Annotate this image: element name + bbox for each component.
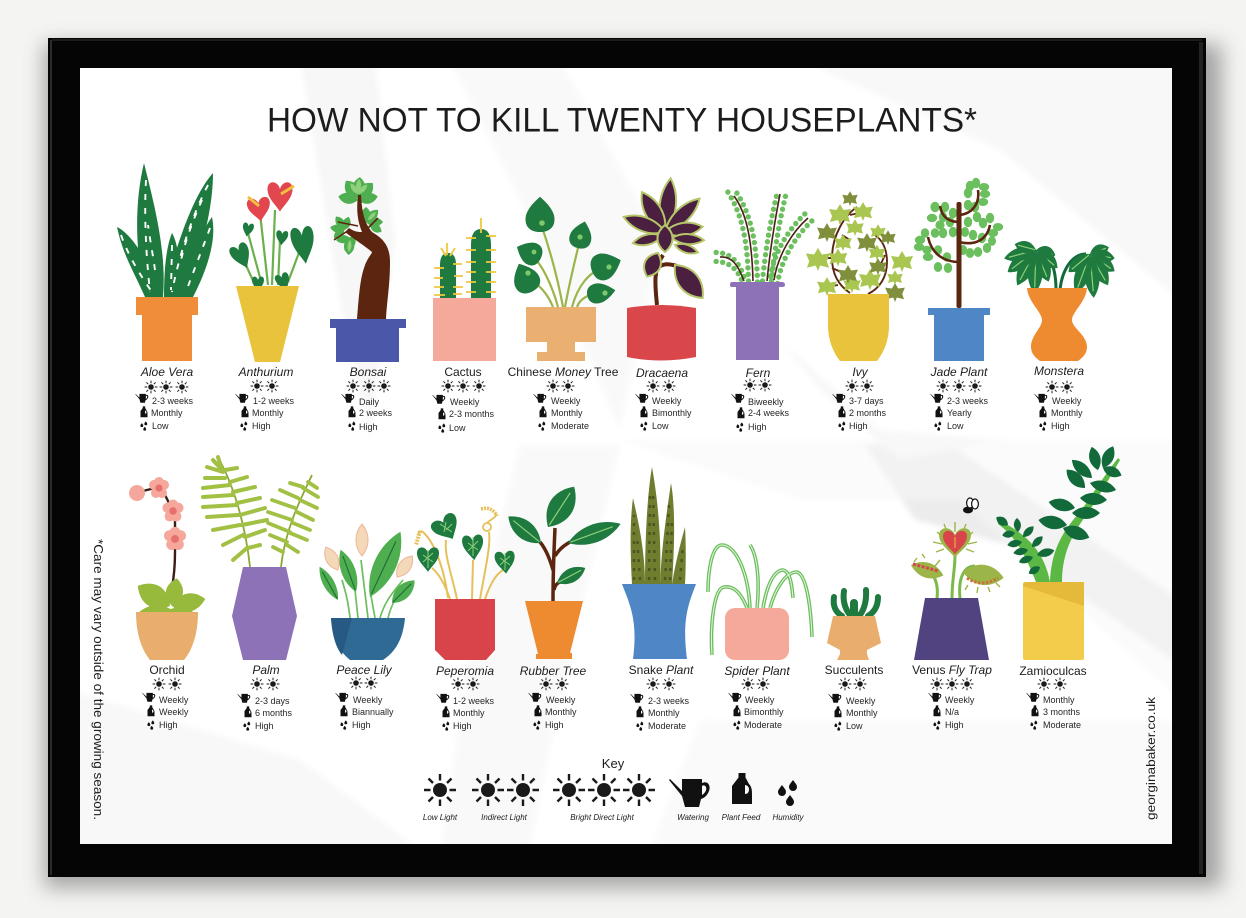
- white poster panel: [80, 68, 1172, 844]
- purple leaves: [621, 177, 710, 304]
- care info: High: [359, 422, 378, 432]
- plant: Peace Lily: [315, 524, 420, 730]
- care info: Low: [846, 721, 863, 731]
- aloe pot: [136, 297, 198, 361]
- care info: [528, 678, 577, 730]
- care info: Monthly: [1043, 695, 1075, 705]
- care info: Weekly: [945, 695, 975, 705]
- green frond dots: [712, 190, 816, 286]
- name: Peace Lily: [336, 663, 393, 677]
- care info: Moderate: [744, 720, 782, 730]
- name: Ivy: [852, 365, 869, 379]
- care info: Weekly: [551, 396, 581, 406]
- care info: 1-2 weeks: [453, 696, 495, 706]
- orchid stem: [143, 488, 175, 592]
- name: Orchid: [149, 663, 185, 677]
- name: Rubber Tree: [520, 664, 587, 678]
- care info: 2-3 weeks: [152, 396, 194, 406]
- plant: Snake Plant: [622, 467, 696, 731]
- humidity: Humidity: [772, 813, 805, 822]
- watering: [669, 779, 710, 822]
- plant: Aloe Vera: [117, 163, 213, 431]
- care info: Monthly: [252, 408, 284, 418]
- name: Snake Plant: [629, 663, 694, 677]
- care info: 2 weeks: [359, 408, 393, 418]
- care info: Bimonthly: [744, 707, 784, 717]
- key / legend: [423, 756, 805, 822]
- yellow stems: [418, 531, 503, 599]
- plant: Anthurium: [228, 182, 317, 431]
- care info: High: [252, 421, 271, 431]
- blue pot: [622, 584, 696, 659]
- care info: Weekly: [159, 695, 189, 705]
- care info: Weekly: [353, 695, 383, 705]
- plant: Monstera: [1002, 238, 1119, 431]
- pink rounded pot: [725, 608, 789, 660]
- indirect light: Indirect Light: [481, 813, 528, 822]
- plant feed: Plant Feed: [722, 813, 761, 822]
- care info: [930, 380, 989, 431]
- plant: Orchid: [129, 477, 207, 730]
- plant: Venus Fly Trap: [909, 498, 1005, 730]
- watering: Watering: [677, 813, 709, 822]
- name: Cactus: [444, 365, 482, 379]
- ivy leaves: [806, 191, 913, 302]
- care info: [630, 678, 690, 731]
- plant: Peperomia: [416, 508, 516, 731]
- care info: Monthly: [846, 708, 878, 718]
- care info: 2-3 weeks: [648, 696, 690, 706]
- red pot: [435, 599, 495, 660]
- trunk: [334, 195, 390, 319]
- arching leaves: [708, 545, 812, 655]
- humidity: [772, 780, 805, 822]
- name: Zamioculcas: [1019, 664, 1087, 678]
- green stems: [998, 458, 1120, 582]
- care info: High: [159, 720, 178, 730]
- care info: Monthly: [551, 408, 583, 418]
- care info: [341, 380, 393, 432]
- fly: [963, 498, 978, 513]
- care info: [135, 381, 194, 431]
- plant: Succulents: [825, 590, 883, 731]
- plant feed: [722, 773, 761, 822]
- care info: High: [255, 721, 274, 731]
- title: HOW NOT TO KILL TWENTY HOUSEPLANTS*: [267, 102, 977, 140]
- care info: 2-3 months: [449, 409, 495, 419]
- key heading: Key: [602, 756, 625, 771]
- plant: Jade Plant: [914, 178, 1003, 431]
- purple hexagon pot: [232, 567, 297, 660]
- name: Fern: [746, 366, 771, 380]
- fronds: [203, 457, 318, 567]
- care info: 2-3 days: [255, 696, 290, 706]
- red flowers: [246, 182, 294, 223]
- blue pot: [928, 308, 990, 361]
- care info: Yearly: [947, 408, 972, 418]
- trunk and branches: [928, 190, 990, 262]
- plant: Palm: [203, 457, 318, 731]
- care info: [731, 379, 790, 432]
- name: Succulents: [825, 663, 883, 677]
- pink pot: [433, 298, 496, 361]
- care info: Weekly: [1052, 396, 1082, 406]
- care info: Low: [947, 421, 964, 431]
- yellow pot: [828, 294, 889, 361]
- name: Spider Plant: [724, 664, 790, 678]
- plant: Ivy: [806, 191, 913, 431]
- blue bowl pot: [331, 618, 405, 660]
- name: Peperomia: [436, 664, 494, 678]
- cream flowers: [320, 524, 417, 581]
- plant: Zamioculcas: [994, 444, 1123, 730]
- care info: 2-3 weeks: [947, 396, 989, 406]
- purple pot: [730, 282, 785, 360]
- care info: Daily: [359, 397, 380, 407]
- patterned leaves: [417, 511, 516, 574]
- name: Monstera: [1034, 364, 1084, 378]
- care info: Moderate: [1043, 720, 1081, 730]
- trunk and branches: [540, 528, 570, 601]
- monstera leaves: [1002, 238, 1119, 298]
- leaves: [503, 480, 624, 589]
- name: Aloe Vera: [140, 365, 193, 379]
- low light: [423, 774, 458, 822]
- dark purple pot: [914, 598, 989, 660]
- care info: N/a: [945, 707, 959, 717]
- care info: High: [748, 422, 767, 432]
- bright direct light: Bright Direct Light: [570, 813, 635, 822]
- care info: Weekly: [546, 695, 576, 705]
- care info: [533, 380, 589, 431]
- care info: 1-2 weeks: [253, 396, 295, 406]
- name: Bonsai: [350, 365, 387, 379]
- name: Chinese Money Tree: [508, 365, 619, 379]
- pink flowers: [129, 477, 186, 550]
- plant: Rubber Tree: [503, 480, 624, 730]
- care info: Monthly: [648, 708, 680, 718]
- yellow pot: [1023, 582, 1084, 660]
- faint crumpled-paper background folds: [868, 444, 1172, 659]
- care info: High: [545, 720, 564, 730]
- care info: High: [352, 720, 371, 730]
- care info: [928, 678, 975, 730]
- stems: [530, 224, 600, 307]
- care info: Low: [449, 423, 466, 433]
- round leaves: [507, 197, 625, 305]
- fleshy leaves: [834, 590, 878, 616]
- website credit: georginabaker.co.uk: [1146, 697, 1158, 820]
- plant: Chinese Money Tree: [507, 197, 625, 431]
- care info: Low: [152, 421, 169, 431]
- care info: 3-7 days: [849, 396, 884, 406]
- name: Venus Fly Trap: [912, 663, 992, 677]
- care info: Monthly: [151, 408, 183, 418]
- plant: Cactus: [432, 218, 496, 433]
- care info: Monthly: [545, 707, 577, 717]
- tan pot: [526, 307, 596, 361]
- care info: [728, 678, 784, 730]
- plant: Dracaena: [621, 177, 710, 431]
- care info: Biweekly: [748, 397, 784, 407]
- indirect light: [472, 774, 539, 822]
- footnote: *Care may vary outside of the growing season.: [91, 539, 105, 820]
- trap lashes: [914, 522, 1000, 593]
- trunk: [655, 255, 677, 305]
- care info: Weekly: [846, 696, 876, 706]
- name: Anthurium: [238, 365, 293, 379]
- care info: [335, 677, 394, 730]
- care info: Moderate: [551, 421, 589, 431]
- traps: [909, 528, 1005, 588]
- stems: [342, 560, 403, 618]
- yellow pot: [236, 286, 299, 362]
- tan bowl pot: [136, 612, 198, 660]
- round green leaves: [914, 178, 1003, 272]
- care info: [432, 380, 495, 433]
- name: Dracaena: [636, 366, 688, 380]
- low light: Low Light: [423, 813, 458, 822]
- care info: High: [1051, 421, 1070, 431]
- blue pot: [330, 319, 406, 362]
- care info: [635, 380, 692, 431]
- care info: [436, 678, 495, 731]
- stems: [1040, 252, 1086, 290]
- stems: [245, 210, 300, 285]
- care info: 2 months: [849, 408, 887, 418]
- care info: [832, 380, 887, 431]
- leaves: [315, 527, 420, 608]
- care info: [237, 678, 293, 731]
- care info: Weekly: [652, 396, 682, 406]
- care info: [235, 380, 295, 431]
- stems: [933, 555, 975, 598]
- care info: 2-4 weeks: [748, 408, 790, 418]
- care info: [1026, 678, 1081, 730]
- hooks and loop: [416, 508, 497, 545]
- care info: High: [849, 421, 868, 431]
- care info: [142, 678, 189, 730]
- care info: Weekly: [745, 695, 775, 705]
- green leaves: [228, 222, 317, 293]
- orange vase: [1027, 288, 1087, 361]
- brown frond stems: [720, 194, 808, 281]
- yellow spines: [434, 218, 496, 295]
- care info: Weekly: [159, 707, 189, 717]
- vines: [820, 207, 887, 294]
- plant: Spider Plant: [708, 545, 812, 730]
- care info: Weekly: [450, 397, 480, 407]
- care info: Biannually: [352, 707, 394, 717]
- care info: 6 months: [255, 708, 293, 718]
- plant: Fern: [712, 190, 816, 432]
- orange pot: [525, 601, 583, 659]
- care info: Moderate: [648, 721, 686, 731]
- aloe leaves: [117, 163, 213, 297]
- red pot: [627, 305, 696, 360]
- dark leaves: [994, 444, 1123, 577]
- sword leaves: [631, 467, 686, 584]
- olive leaves: [132, 576, 207, 622]
- care info: Low: [652, 421, 669, 431]
- plant: Bonsai: [330, 177, 406, 432]
- care info: High: [945, 720, 964, 730]
- care info: Monthly: [1051, 408, 1083, 418]
- care info: High: [453, 721, 472, 731]
- cactus stems: [440, 229, 491, 298]
- name: Jade Plant: [930, 365, 988, 379]
- care info: [1034, 381, 1083, 431]
- care info: Monthly: [453, 708, 485, 718]
- care info: Bimonthly: [652, 408, 692, 418]
- tan pot: [827, 616, 881, 660]
- foliage: [330, 177, 384, 255]
- care info: [828, 678, 878, 731]
- name: Palm: [252, 663, 280, 677]
- bright direct light: [553, 774, 655, 822]
- care info: 3 months: [1043, 707, 1081, 717]
